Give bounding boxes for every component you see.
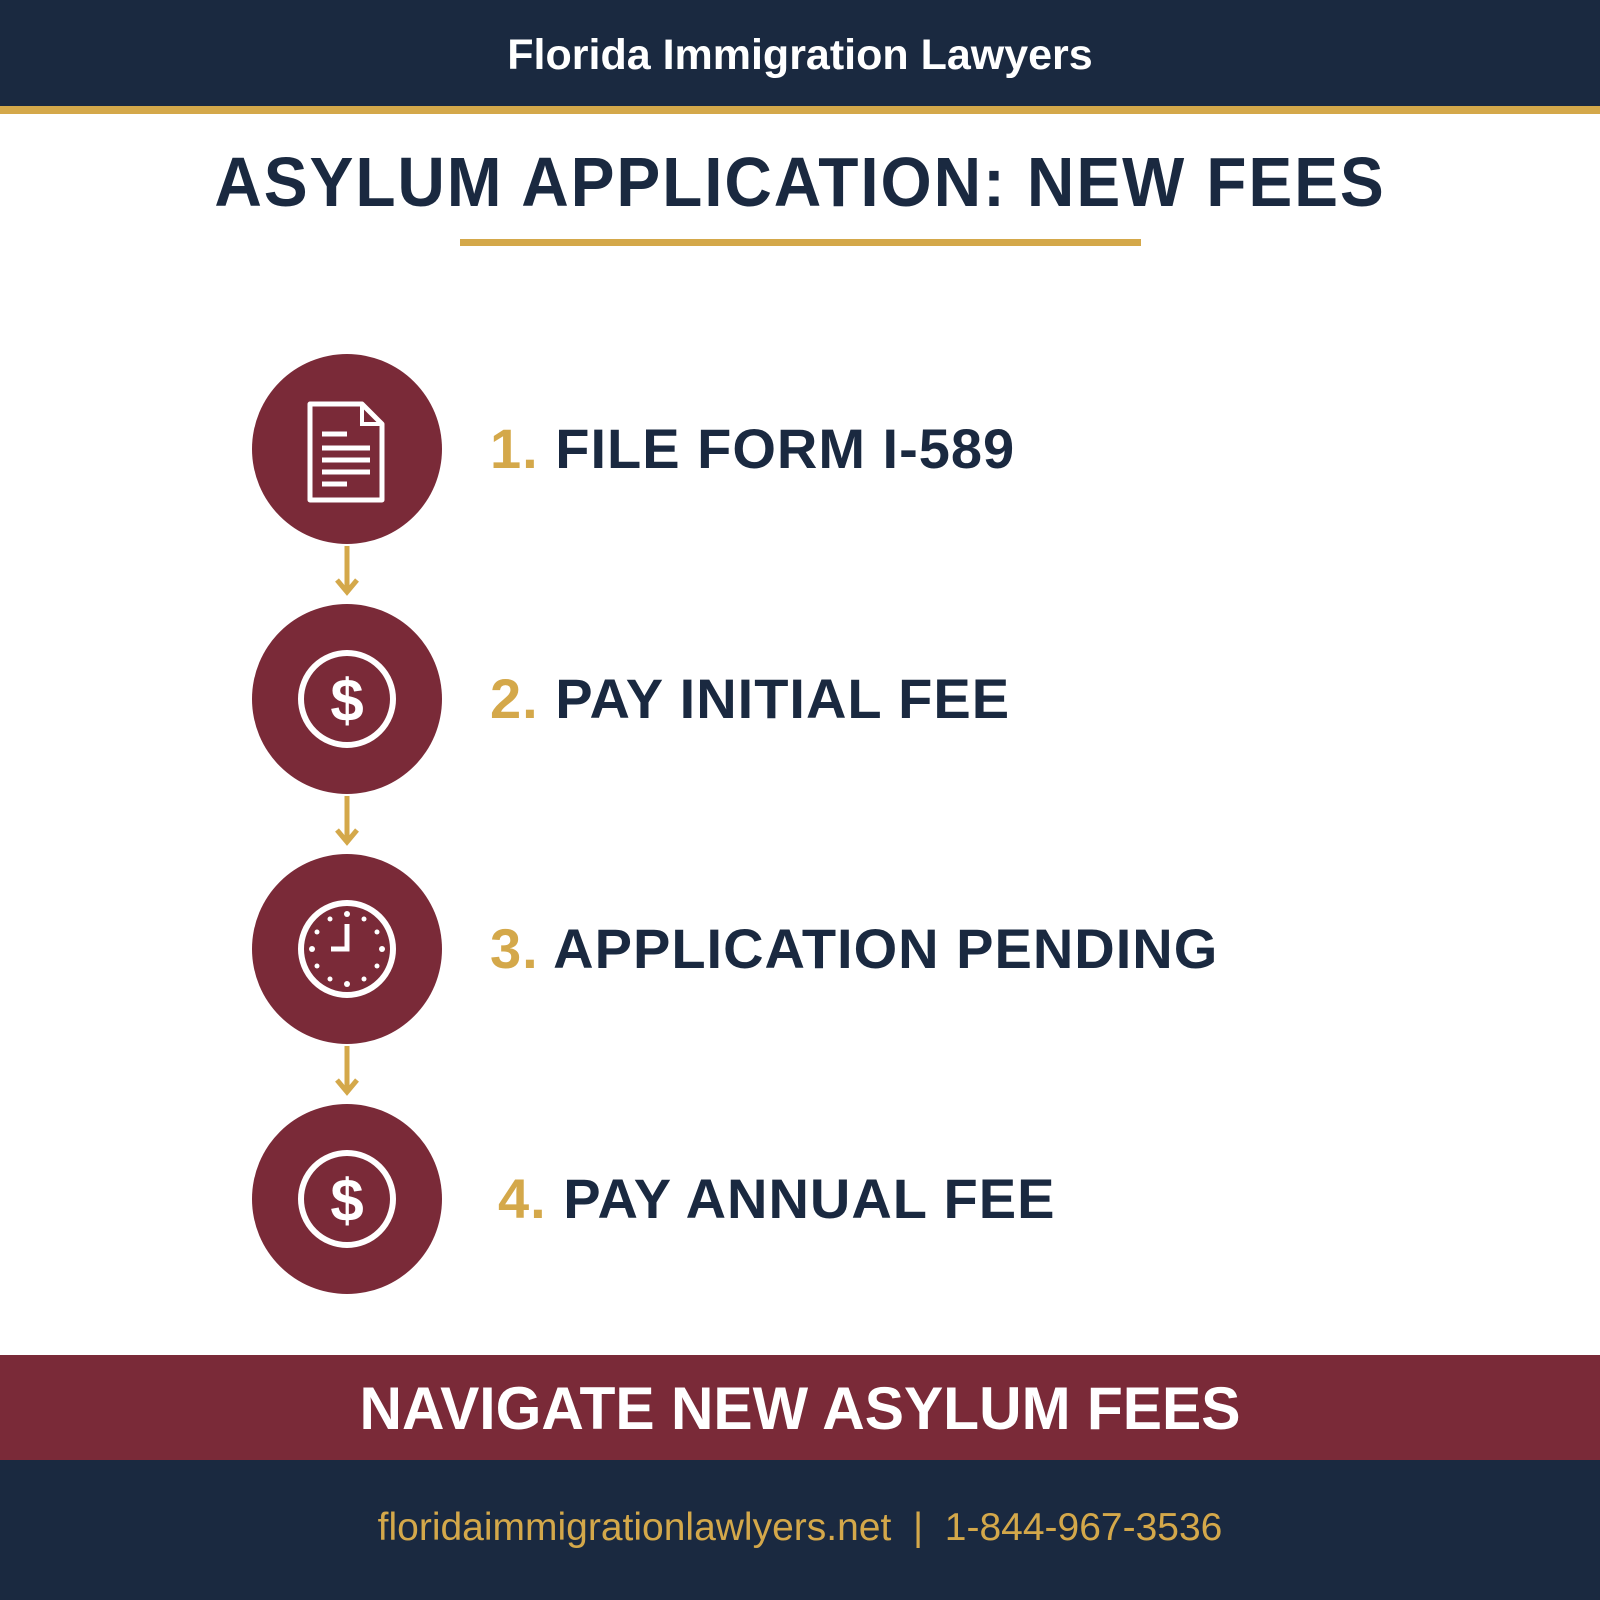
footer contact: floridaimmigrationlawlyers.net | 1-844-967-3536 [378,1506,1222,1549]
step 4 icon: dollar [252,1104,442,1294]
step 1 icon: document [252,354,442,544]
arrow 2 [335,796,359,846]
step 2 icon: dollar: $ [330,667,364,734]
arrow 3 [335,1046,359,1096]
header text: Florida Immigration Lawyers [507,31,1093,79]
step 2 icon: dollar [252,604,442,794]
title: ASYLUM APPLICATION: NEW FEES [214,143,1386,221]
title underline [460,239,1141,246]
step 4 text: 4. PAY ANNUAL FEE [498,1167,1055,1230]
arrow 1 [335,546,359,596]
header bar [0,0,1600,106]
banner text: NAVIGATE NEW ASYLUM FEES [360,1375,1240,1442]
step 3 icon: clock [252,854,442,1044]
footer [0,1460,1600,1600]
step 1 text: 1. FILE FORM I-589 [490,417,1015,480]
banner [0,1355,1600,1460]
step 2 text: 2. PAY INITIAL FEE [490,667,1010,730]
step 4 icon: dollar: $ [330,1167,364,1234]
step 3 text: 3. APPLICATION PENDING [490,917,1218,980]
